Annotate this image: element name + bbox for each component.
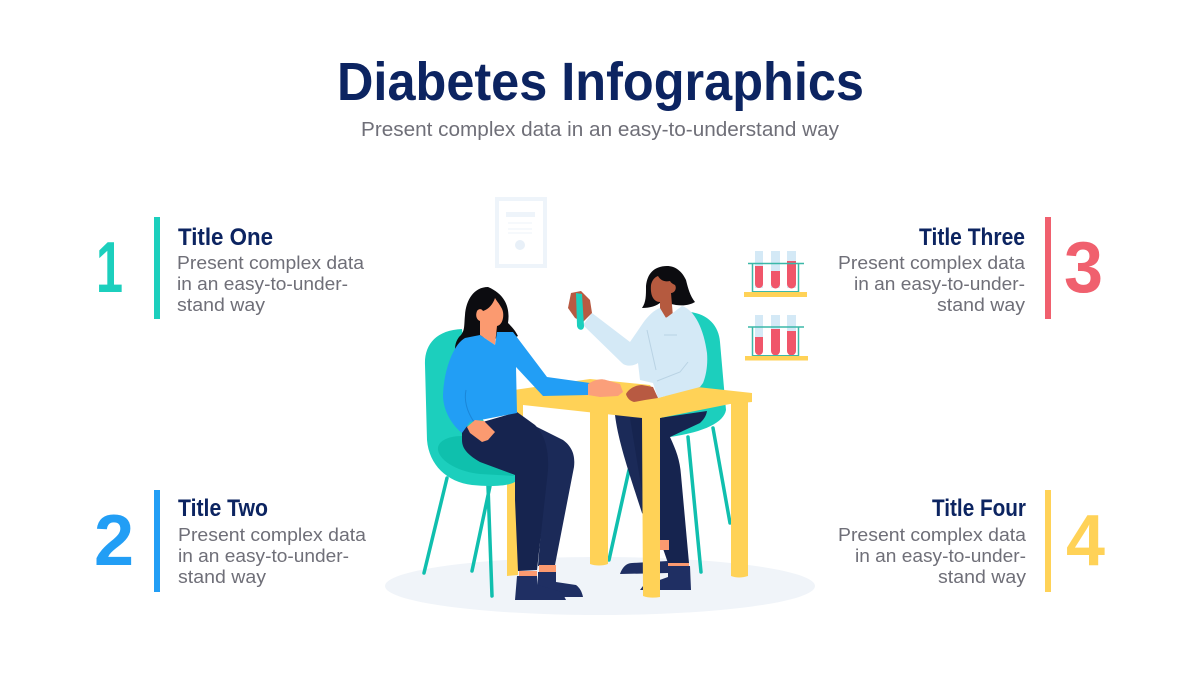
text block 4: stand way <box>938 566 1027 587</box>
text block 4: in an easy-to-under- <box>855 545 1026 566</box>
number 2: 2 <box>94 501 134 581</box>
heading: title two: Title Two <box>178 495 268 522</box>
patient blue top <box>443 332 590 433</box>
illustration: doctor consultation <box>385 199 815 615</box>
floor shadow <box>385 557 815 615</box>
accent bar 1 <box>154 217 160 319</box>
heading: title four: Title Four <box>932 495 1026 522</box>
doctor legs <box>615 411 707 590</box>
patient legs <box>462 412 583 600</box>
icon: wall certificate <box>497 199 545 266</box>
accent bar 3 <box>1045 217 1051 319</box>
accent bar 2 <box>154 490 160 592</box>
patient hand on table <box>588 379 623 397</box>
panel: item 3 <box>838 217 1103 319</box>
text block 1: Present complex data <box>177 252 365 273</box>
doctor chair <box>609 312 730 572</box>
doctor face <box>651 276 676 318</box>
text block 2: stand way <box>178 566 267 587</box>
text block 1 <box>177 252 365 315</box>
panel: item 2 <box>94 490 367 592</box>
patient hair <box>453 287 518 361</box>
number 1: 1 <box>96 228 123 308</box>
text block 4 <box>838 524 1027 587</box>
text block 3: in an easy-to-under- <box>854 273 1025 294</box>
panel: item 1 <box>96 217 365 319</box>
icon: test tube rack top <box>744 251 807 297</box>
accent bar 4 <box>1045 490 1051 592</box>
panel: item 4 <box>838 490 1105 592</box>
patient chair <box>424 329 516 596</box>
number 4: 4 <box>1066 501 1105 581</box>
text block 3: Present complex data <box>838 252 1026 273</box>
text block 2: Present complex data <box>178 524 367 545</box>
text block 2: in an easy-to-under- <box>178 545 349 566</box>
text block 4: Present complex data <box>838 524 1027 545</box>
text block 3 <box>838 252 1026 315</box>
patient face and neck <box>476 298 503 345</box>
heading: title one: Title One <box>178 224 273 251</box>
doctor hair <box>642 266 695 308</box>
text block 3: stand way <box>937 294 1026 315</box>
patient hand on knee <box>467 420 495 442</box>
title: Diabetes Infographics <box>337 52 864 112</box>
doctor lab coat <box>583 306 707 398</box>
text block 1: in an easy-to-under- <box>177 273 348 294</box>
number 3: 3 <box>1064 228 1103 308</box>
table <box>507 379 752 598</box>
heading: title three: Title Three <box>919 224 1025 251</box>
subtitle: Present complex data in an easy-to-understand way <box>361 119 839 141</box>
doctor hand on table <box>626 385 658 402</box>
doctor raised hand with tube <box>568 291 592 330</box>
text block 1: stand way <box>177 294 266 315</box>
text block 2 <box>178 524 367 587</box>
icon: test tube rack bottom <box>745 315 808 360</box>
